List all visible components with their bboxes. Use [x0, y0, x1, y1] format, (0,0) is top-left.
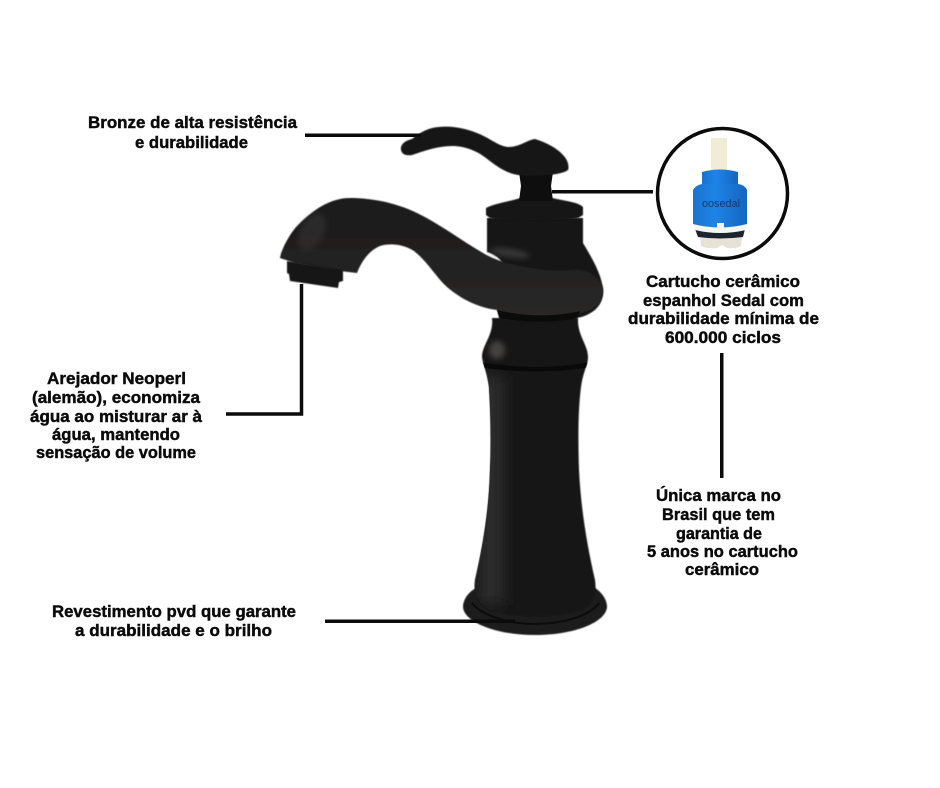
label: aerator: Arejador Neoperl: [47, 369, 186, 388]
collar highlight: [489, 341, 505, 359]
cartridge ring: [695, 229, 745, 238]
cartridge white band: [694, 224, 747, 233]
faucet cap: [486, 198, 583, 220]
label: aerator: água ao misturar ar à: [30, 407, 203, 426]
spout highlight: [292, 209, 332, 255]
label: warranty: [647, 486, 798, 579]
label: coating: a durabilidade e o brilho: [75, 621, 272, 640]
label: coating: Revestimento pvd que garante: [52, 602, 296, 621]
label: aerator: sensação de volume: [36, 443, 196, 462]
label: bronze: e durabilidade: [135, 133, 248, 152]
label: aerator: água, mantendo: [52, 425, 180, 444]
label: warranty: Brasil que tem: [662, 505, 775, 524]
label: cartridge: espanhol Sedal com: [643, 291, 804, 310]
label: cartridge: Cartucho cerâmico: [646, 272, 800, 291]
label: warranty: Única marca no: [656, 486, 781, 505]
faucet illustration: [280, 127, 607, 635]
cartridge blue top: [702, 170, 738, 186]
cartridge notch: [717, 223, 724, 230]
faucet spout: [280, 198, 603, 316]
cartridge stem: [711, 138, 727, 171]
label: aerator: [30, 369, 203, 462]
label: cartridge: 600.000 ciclos: [665, 328, 781, 347]
label: cartridge: durabilidade mínima de: [628, 309, 819, 328]
circle frame: [658, 128, 788, 258]
faucet base: [463, 586, 607, 635]
cartridge callout: [658, 128, 788, 258]
faucet neck and body: [487, 218, 603, 324]
cartridge blue body: [693, 184, 747, 228]
pointer line: handle: [305, 134, 421, 137]
faucet column: [475, 318, 595, 616]
label: cartridge: [628, 272, 819, 347]
pointer line: cartridge: [552, 190, 653, 194]
label: warranty: cerâmico: [685, 560, 759, 579]
label: aerator: (alemão), economiza: [32, 388, 201, 407]
label: bronze: Bronze de alta resistência: [88, 113, 298, 132]
body highlight: [490, 246, 530, 260]
handle lever: [401, 127, 568, 175]
aerator: [287, 261, 343, 288]
pointer line: aerator: [226, 284, 302, 414]
label: warranty: garantia de: [676, 524, 762, 543]
body shadow band: [497, 310, 580, 322]
pointer line: warranty: [720, 353, 724, 478]
pointer line: coating: [325, 620, 515, 623]
label: bronze: [88, 113, 298, 152]
label: coating: [52, 602, 296, 640]
cartridge brand: oosedal: [702, 198, 740, 210]
cartridge feet: [700, 236, 742, 248]
label: warranty: 5 anos no cartucho: [647, 542, 798, 561]
handle stem: [519, 172, 553, 201]
